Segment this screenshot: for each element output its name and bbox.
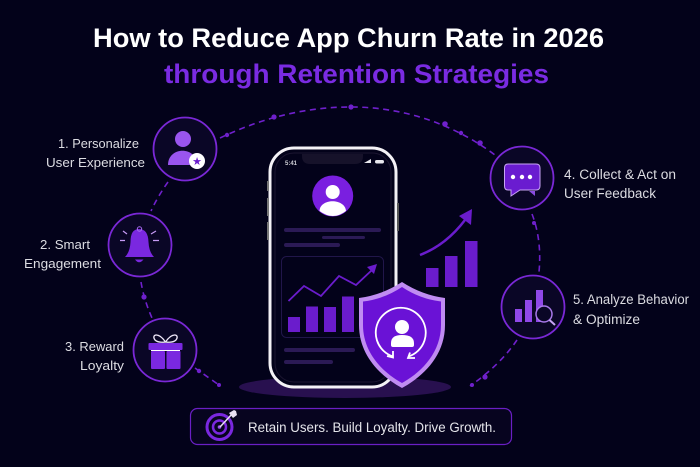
circle 5: analytics bbox=[502, 276, 564, 338]
title: How to Reduce App Churn Rate in 2026 bbox=[93, 23, 604, 53]
label 5 bbox=[573, 292, 690, 327]
icon: target bbox=[207, 410, 237, 440]
phone bbox=[267, 148, 399, 387]
phone ground shadow bbox=[239, 376, 451, 398]
text placeholder lines bbox=[284, 228, 381, 364]
circle 4: chat bbox=[490, 146, 554, 210]
label 5: 5. Analyze Behavior bbox=[573, 292, 690, 307]
circle 1: personalize: ★ bbox=[192, 156, 202, 168]
profile avatar bbox=[312, 176, 353, 216]
growth chart bbox=[420, 209, 478, 287]
label 3 bbox=[65, 339, 124, 373]
label 2 bbox=[24, 237, 101, 271]
label 2: 2. Smart bbox=[40, 237, 90, 252]
label 4: 4. Collect & Act on bbox=[564, 167, 676, 182]
shield bbox=[359, 282, 445, 388]
tagline text: Retain Users. Build Loyalty. Drive Growth. bbox=[248, 420, 496, 435]
circle 3: gift bbox=[134, 318, 196, 382]
tagline banner bbox=[190, 408, 512, 444]
label 3: Loyalty bbox=[80, 358, 124, 373]
status bar: 5:41 bbox=[285, 161, 298, 167]
label 2: Engagement bbox=[24, 256, 101, 271]
circle 2: bell bbox=[108, 214, 172, 276]
title: through Retention Strategies bbox=[164, 59, 549, 89]
dashed connector path bbox=[141, 104, 540, 387]
label 5: & Optimize bbox=[573, 312, 640, 327]
label 1: User Experience bbox=[46, 155, 145, 170]
label 4 bbox=[564, 167, 676, 201]
title bbox=[93, 23, 604, 89]
label 1: 1. Personalize bbox=[58, 136, 139, 151]
label 1 bbox=[46, 136, 145, 170]
circle 1: personalize bbox=[154, 118, 216, 180]
label 4: User Feedback bbox=[564, 186, 656, 201]
phone chart bbox=[282, 256, 384, 338]
label 3: 3. Reward bbox=[65, 339, 124, 354]
